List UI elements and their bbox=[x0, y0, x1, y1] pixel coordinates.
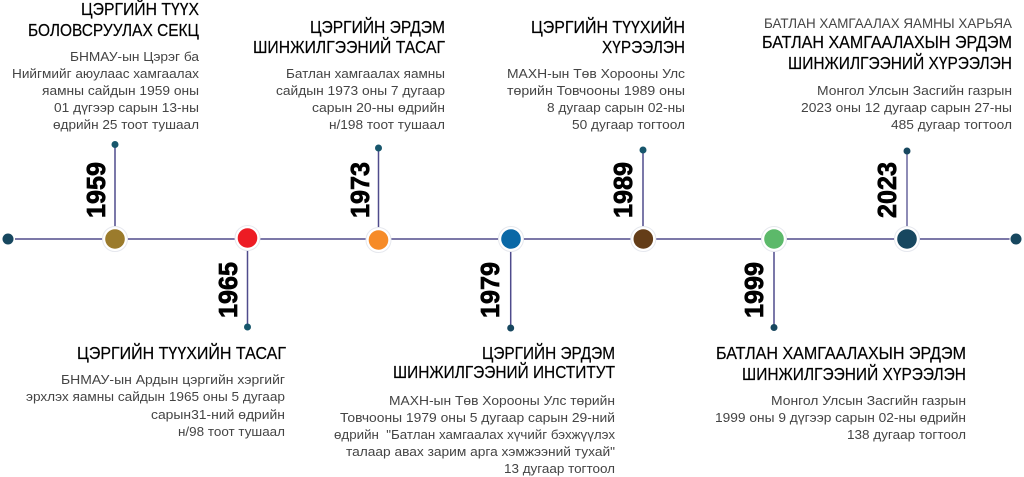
heading 1979: ЦЭРГИЙН ЭРДЭМ bbox=[482, 342, 615, 363]
heading 1973: ШИНЖИЛГЭЭНИЙ ТАСАГ bbox=[253, 36, 445, 57]
description 1973 bbox=[276, 66, 445, 132]
description 1979: МАХН-ын Төв Хорооны Улс төрийн bbox=[389, 393, 615, 408]
stem dot 1973 bbox=[375, 144, 382, 152]
milestone 2023 bbox=[762, 16, 1012, 252]
description 1973: н/198 тоот тушаал bbox=[329, 117, 445, 132]
stem 1999 bbox=[773, 251, 775, 325]
stem 1965 bbox=[246, 250, 248, 325]
stem 1959 bbox=[114, 146, 116, 228]
stem dot 1989 bbox=[640, 146, 646, 154]
year 1999: 1999 bbox=[739, 262, 769, 318]
description 1989 bbox=[507, 66, 685, 132]
heading 1989 bbox=[531, 16, 685, 57]
description 2023: 2023 оны 12 дугаар сарын 27-ны bbox=[801, 100, 1012, 115]
description 1999 bbox=[715, 393, 966, 442]
description 2023: 485 дугаар тогтоол bbox=[891, 117, 1012, 132]
description 1959: 01 дүгээр сарын 13-ны bbox=[54, 100, 199, 115]
year 2023: 2023 bbox=[872, 162, 902, 218]
year 1979: 1979 bbox=[475, 262, 505, 318]
description 1965: БНМАУ-ын Ардын цэргийн хэргийг bbox=[61, 372, 285, 387]
description 1989: төрийн Товчооны 1989 оны bbox=[507, 83, 685, 98]
description 1973: сарын 20-ны өдрийн bbox=[312, 100, 445, 115]
stem 1973 bbox=[378, 150, 380, 228]
milestone 1965 bbox=[26, 226, 286, 439]
description 1965: сарын31-ний өдрийн bbox=[151, 407, 285, 422]
milestone 1989 bbox=[507, 16, 685, 252]
description 1999: 138 дугаар тогтоол bbox=[847, 427, 966, 442]
year 1989: 1989 bbox=[608, 162, 638, 218]
heading 1979 bbox=[393, 342, 615, 382]
year 1973: 1973 bbox=[345, 162, 375, 218]
stem 1979 bbox=[510, 251, 512, 326]
milestone 1999 bbox=[715, 226, 966, 442]
heading 1959: БОЛОВСРУУЛАХ СЕКЦ bbox=[28, 20, 199, 40]
description 1999: Монгол Улсын Засгийн газрын bbox=[771, 393, 966, 408]
node 1999 bbox=[762, 226, 786, 252]
node 1973 bbox=[366, 228, 391, 252]
year 1965: 1965 bbox=[213, 262, 243, 318]
heading 1999: БАТЛАН ХАМГААЛАХЫН ЭРДЭМ bbox=[716, 343, 966, 363]
stem dot 1959 bbox=[112, 141, 118, 148]
description 1959: Нийгмийг аюулаас хамгаалах bbox=[12, 66, 199, 81]
heading 1973 bbox=[253, 16, 445, 57]
node 1979 bbox=[498, 226, 524, 252]
heading 2023 bbox=[762, 32, 1012, 73]
heading 1973: ЦЭРГИЙН ЭРДЭМ bbox=[310, 16, 445, 37]
stem dot 1965 bbox=[244, 324, 251, 330]
heading 1979: ШИНЖИЛГЭЭНИЙ ИНСТИТУТ bbox=[393, 361, 615, 382]
year 1959: 1959 bbox=[81, 162, 111, 218]
stem dot 1979 bbox=[507, 324, 514, 332]
stem 1989 bbox=[642, 152, 644, 228]
heading 1989: ХҮРЭЭЛЭН bbox=[602, 37, 685, 57]
description 1973: Батлан хамгаалах яамны bbox=[286, 66, 445, 81]
description 1979: 13 дугаар тогтоол bbox=[504, 461, 615, 476]
node 2023 bbox=[894, 226, 920, 252]
description 1959: өдрийн 25 тоот тушаал bbox=[53, 117, 199, 132]
description 1973: сайдын 1973 оны 7 дугаар bbox=[276, 83, 445, 98]
timeline axis bbox=[15, 238, 1010, 240]
milestone 1979 bbox=[334, 226, 615, 476]
parent organisation line 2023: БАТЛАН ХАМГААЛАХ ЯАМНЫ ХАРЬЯА bbox=[764, 16, 1012, 31]
heading 1965: ЦЭРГИЙН ТҮҮХИЙН ТАСАГ bbox=[77, 342, 286, 363]
heading 1999: ШИНЖИЛГЭЭНИЙ ХҮРЭЭЛЭН bbox=[742, 363, 966, 384]
heading 1989: ЦЭРГИЙН ТҮҮХИЙН bbox=[531, 16, 685, 37]
description 1989: 8 дугаар сарын 02-ны bbox=[547, 100, 685, 115]
node 1959 bbox=[102, 226, 128, 252]
description 1979: Товчооны 1979 оны 5 дугаар сарын 29-ний bbox=[340, 410, 615, 425]
end node bbox=[1010, 232, 1022, 246]
node 1965 bbox=[235, 226, 260, 250]
milestone 1973 bbox=[253, 16, 445, 252]
description 1989: МАХН-ын Төв Хорооны Улс bbox=[507, 66, 685, 81]
stem dot 1999 bbox=[770, 324, 778, 331]
node 1989 bbox=[631, 226, 656, 252]
heading 1959 bbox=[28, 0, 199, 40]
description 1979 bbox=[334, 393, 615, 476]
description 1959 bbox=[12, 49, 200, 132]
start node bbox=[2, 232, 14, 246]
description 1979: өдрийн "Батлан хамгаалах хүчийг бэхжүүлэх bbox=[334, 427, 615, 442]
description 2023 bbox=[801, 83, 1012, 132]
description 2023: Монгол Улсын Засгийн газрын bbox=[817, 83, 1012, 98]
heading 1999 bbox=[716, 343, 966, 384]
description 1959: яамны сайдын 1959 оны bbox=[42, 83, 199, 98]
milestone 1959 bbox=[12, 0, 200, 252]
description 1965: эрхлэх яамны сайдын 1965 оны 5 дугаар bbox=[26, 389, 285, 404]
stem 2023 bbox=[906, 153, 908, 228]
description 1959: БНМАУ-ын Цэрэг ба bbox=[70, 49, 200, 64]
description 1965: н/98 тоот тушаал bbox=[178, 424, 285, 439]
stem dot 2023 bbox=[904, 148, 910, 154]
description 1999: 1999 оны 9 дүгээр сарын 02-ны өдрийн bbox=[715, 410, 966, 425]
description 1965 bbox=[26, 372, 285, 439]
description 1989: 50 дугаар тогтоол bbox=[572, 117, 685, 132]
description 1979: талаар авах зарим арга хэмжээний тухай" bbox=[346, 444, 615, 459]
